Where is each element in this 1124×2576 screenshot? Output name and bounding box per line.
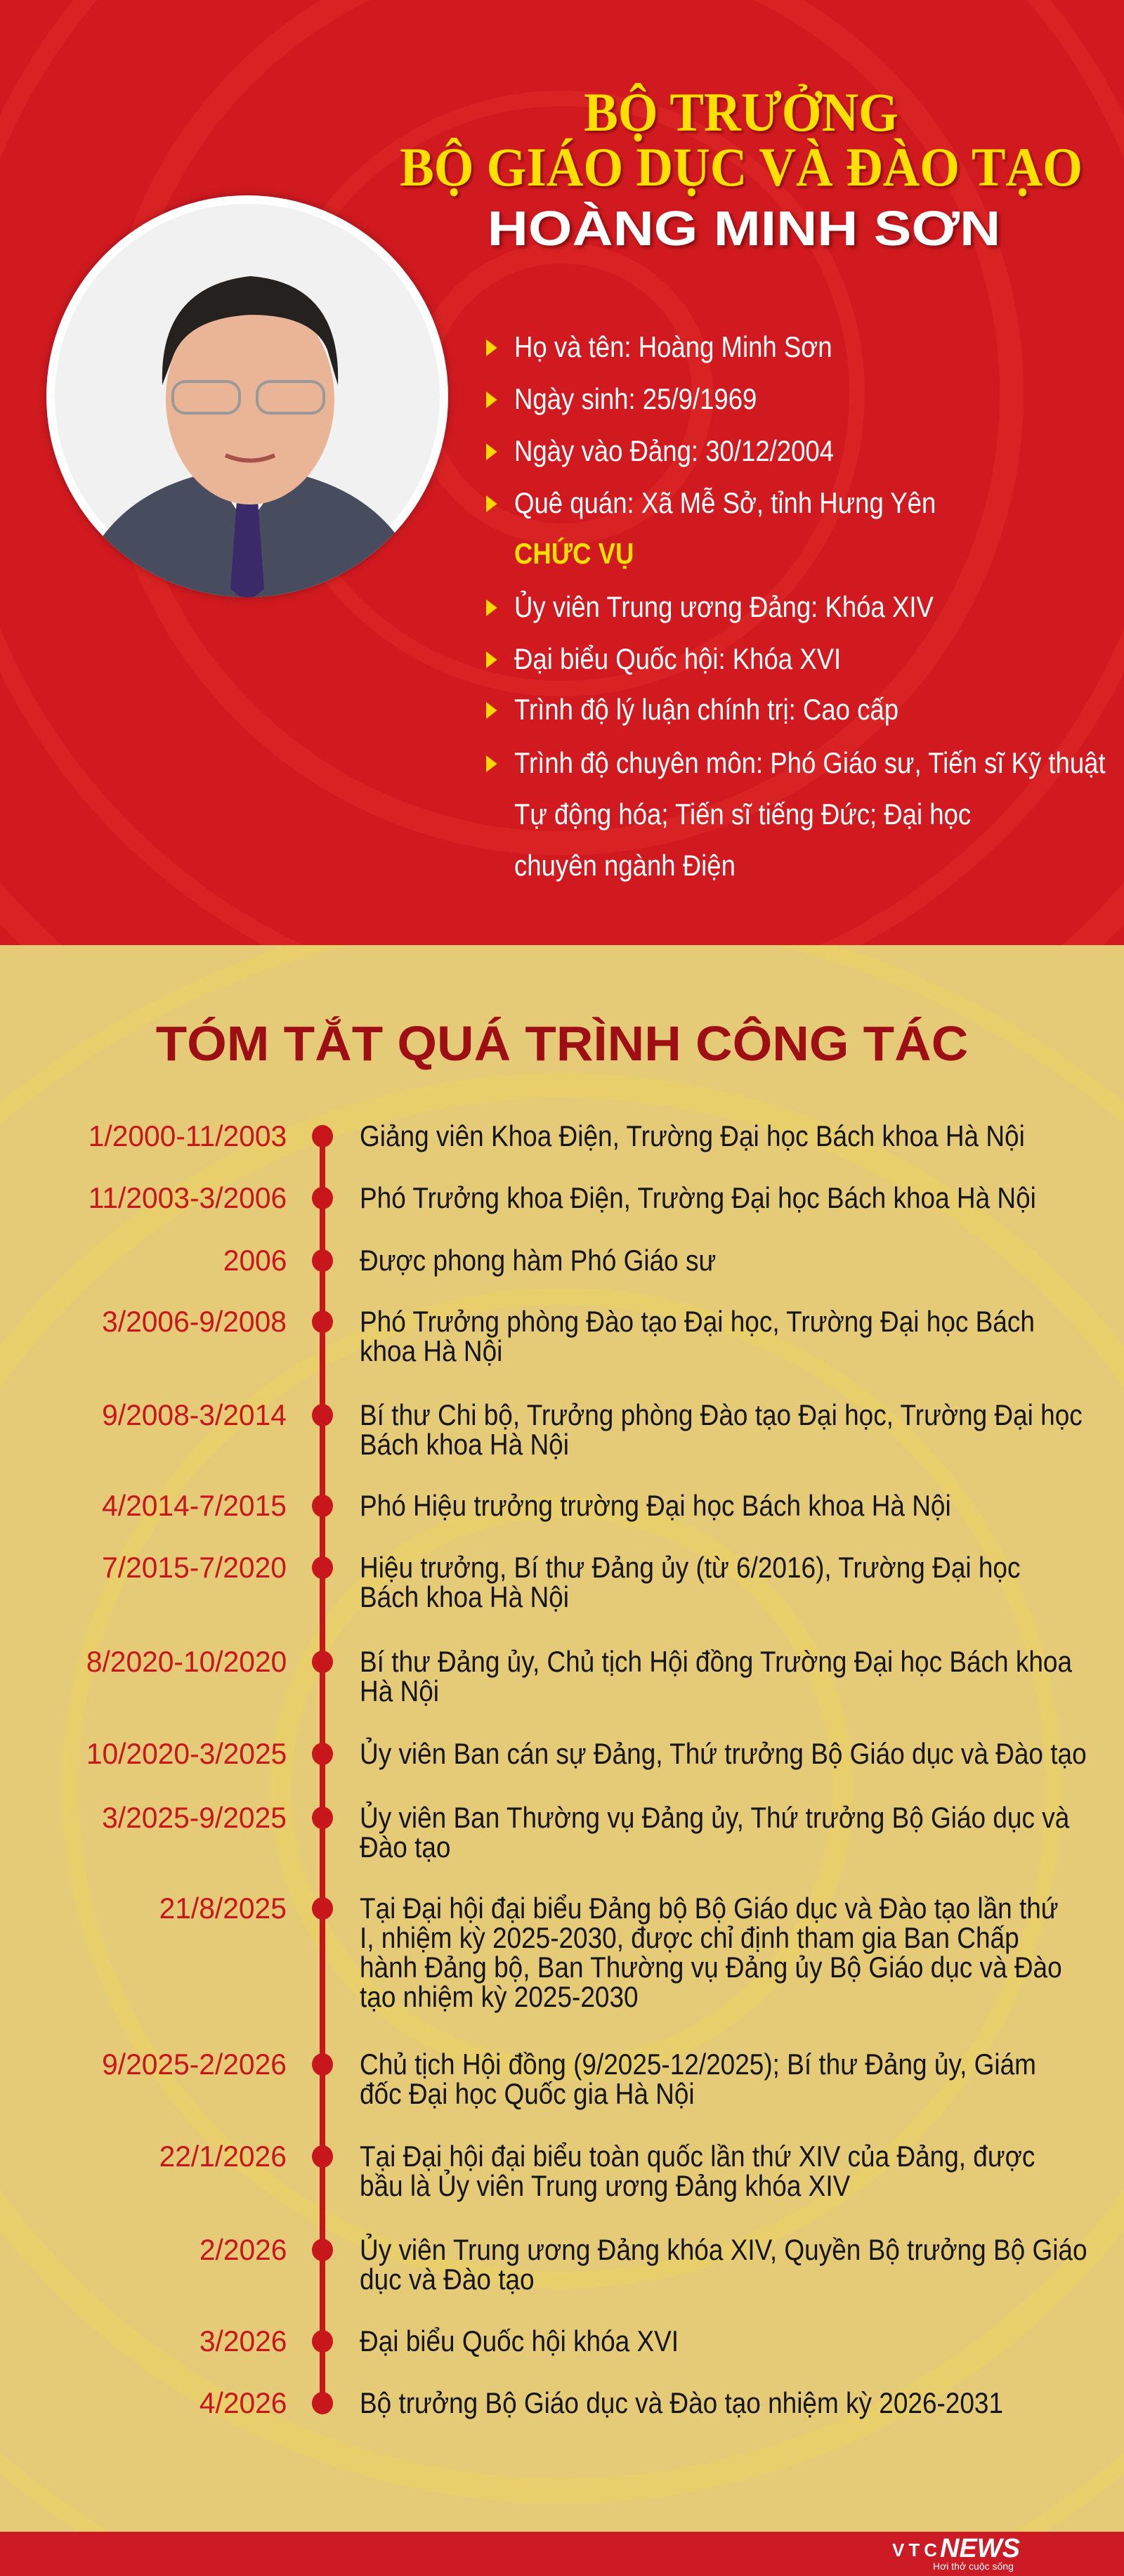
entry 7: 7/2015-7/2020 <box>102 1551 287 1584</box>
info: expertise: chuyên ngành Điện <box>514 849 736 882</box>
logo: VTC News <box>892 2534 1020 2572</box>
entry 13: Tại Đại hội đại biểu toàn quốc lần thứ XIV của Đảng, được <box>360 2140 1035 2173</box>
info: hometown: Quê quán: Xã Mễ Sở, tỉnh Hưng Yên <box>514 486 936 519</box>
entry 14: Ủy viên Trung ương Đảng khóa XIV, Quyền Bộ trưởng Bộ Giáo <box>360 2233 1087 2266</box>
entry 4: Phó Trưởng phòng Đào tạo Đại học, Trường Đại học Bách <box>360 1305 1035 1338</box>
entry 6: 4/2014-7/2015 <box>102 1489 287 1522</box>
logo: VTC News: Hơi thở cuộc sống <box>933 2561 1014 2572</box>
entry 4: khoa Hà Nội <box>360 1334 502 1367</box>
entry 11: 21/8/2025 <box>159 1892 287 1925</box>
entry 1: Giảng viên Khoa Điện, Trường Đại học Bách khoa Hà Nội <box>360 1119 1025 1152</box>
entry 16: Bộ trưởng Bộ Giáo dục và Đào tạo nhiệm kỳ 2026-2031 <box>360 2386 1003 2419</box>
entry 13: bầu là Ủy viên Trung ương Đảng khóa XIV <box>360 2169 850 2202</box>
title <box>400 82 1083 256</box>
info: birth: Ngày sinh: 25/9/1969 <box>514 382 757 415</box>
entry 7: Hiệu trưởng, Bí thư Đảng ủy (từ 6/2016), Trường Đại học <box>360 1551 1020 1584</box>
entry 6 <box>102 1489 951 1522</box>
heading: career summary: TÓM TẮT QUÁ TRÌNH CÔNG TÁC <box>156 1016 968 1071</box>
info: central committee: Ủy viên Trung ương Đảng: Khóa XIV <box>514 590 934 623</box>
info: expertise: Trình độ chuyên môn: Phó Giáo sư, Tiến sĩ Kỹ thuật <box>514 746 1106 779</box>
entry 10: 3/2025-9/2025 <box>102 1801 287 1834</box>
entry 11: hành Đảng bộ, Ban Thường vụ Đảng ủy Bộ Giáo dục và Đào <box>360 1951 1062 1984</box>
entry 5 <box>102 1398 1083 1461</box>
entry 14: 2/2026 <box>199 2233 287 2266</box>
entry 3: Được phong hàm Phó Giáo sư <box>360 1244 716 1277</box>
info list <box>486 330 1106 882</box>
entry 2: 11/2003-3/2006 <box>89 1181 287 1214</box>
entry 1: 1/2000-11/2003 <box>89 1119 287 1152</box>
entry 9: 10/2020-3/2025 <box>86 1737 287 1770</box>
entry 5: Bách khoa Hà Nội <box>360 1428 569 1461</box>
entry 16: 4/2026 <box>199 2386 287 2419</box>
logo: VTC News: VTC <box>892 2539 941 2561</box>
entry 7 <box>102 1551 1020 1613</box>
entry 2: Phó Trưởng khoa Điện, Trường Đại học Bách khoa Hà Nội <box>360 1181 1036 1214</box>
timeline <box>86 1119 1087 2419</box>
info: expertise <box>486 746 1106 882</box>
entry 15: 3/2026 <box>199 2324 287 2357</box>
entry 3: 2006 <box>223 1244 287 1277</box>
entry 15 <box>199 2324 679 2357</box>
entry 11: I, nhiệm kỳ 2025-2030, được chỉ định tham gia Ban Chấp <box>360 1921 1019 1954</box>
entry 6: Phó Hiệu trưởng trường Đại học Bách khoa Hà Nội <box>360 1489 951 1522</box>
info: national assembly: Đại biểu Quốc hội: Khóa XVI <box>514 642 841 675</box>
entry 8: 8/2020-10/2020 <box>86 1645 287 1678</box>
heading: positions: CHỨC VỤ <box>514 537 634 570</box>
title line 2: BỘ GIÁO DỤC VÀ ĐÀO TẠO <box>400 136 1083 197</box>
background: yellow lower section <box>0 945 1124 2532</box>
entry 14: dục và Đào tạo <box>360 2263 535 2296</box>
entry 12: đốc Đại học Quốc gia Hà Nội <box>360 2077 695 2110</box>
entry 11: tạo nhiệm kỳ 2025-2030 <box>360 1980 639 2013</box>
logo: VTC News: NEWS <box>940 2534 1020 2563</box>
entry 8: Bí thư Đảng ủy, Chủ tịch Hội đồng Trường Đại học Bách khoa <box>360 1645 1072 1678</box>
title name: HOÀNG MINH SƠN <box>488 201 1000 256</box>
entry 8: Hà Nội <box>360 1674 439 1707</box>
entry 12 <box>102 2048 1036 2110</box>
background: red top section <box>0 0 1124 945</box>
entry 10 <box>102 1801 1069 1863</box>
entry 13: 22/1/2026 <box>159 2140 287 2173</box>
portrait photo <box>46 195 448 597</box>
entry 5: Bí thư Chi bộ, Trưởng phòng Đào tạo Đại học, Trường Đại học <box>360 1398 1083 1431</box>
entry 4: 3/2006-9/2008 <box>102 1305 287 1338</box>
info: expertise: Tự động hóa; Tiến sĩ tiếng Đức; Đại học <box>514 798 971 831</box>
info: name: Họ và tên: Hoàng Minh Sơn <box>514 330 832 363</box>
entry 15: Đại biểu Quốc hội khóa XVI <box>360 2324 679 2357</box>
entry 12: Chủ tịch Hội đồng (9/2025-12/2025); Bí thư Đảng ủy, Giám <box>360 2048 1036 2081</box>
entry 10: Đào tạo <box>360 1830 450 1863</box>
entry 4 <box>102 1305 1035 1367</box>
entry 8 <box>86 1645 1072 1707</box>
entry 7: Bách khoa Hà Nội <box>360 1580 569 1613</box>
entry 13 <box>159 2140 1035 2202</box>
entry 5: 9/2008-3/2014 <box>102 1398 287 1431</box>
entry 14 <box>199 2233 1087 2296</box>
entry 11 <box>159 1892 1062 2013</box>
timeline line <box>320 1137 325 2403</box>
entry 11: Tại Đại hội đại biểu Đảng bộ Bộ Giáo dục và Đào tạo lần thứ <box>360 1892 1059 1925</box>
entry 10: Ủy viên Ban Thường vụ Đảng ủy, Thứ trưởng Bộ Giáo dục và <box>360 1801 1069 1834</box>
title line 1: BỘ TRƯỞNG <box>584 82 898 143</box>
info: political theory: Trình độ lý luận chính trị: Cao cấp <box>514 693 898 726</box>
info: party date: Ngày vào Đảng: 30/12/2004 <box>514 434 834 467</box>
footer bar <box>0 2532 1124 2576</box>
entry 12: 9/2025-2/2026 <box>102 2048 287 2081</box>
entry 9: Ủy viên Ban cán sự Đảng, Thứ trưởng Bộ Giáo dục và Đào tạo <box>360 1737 1087 1770</box>
